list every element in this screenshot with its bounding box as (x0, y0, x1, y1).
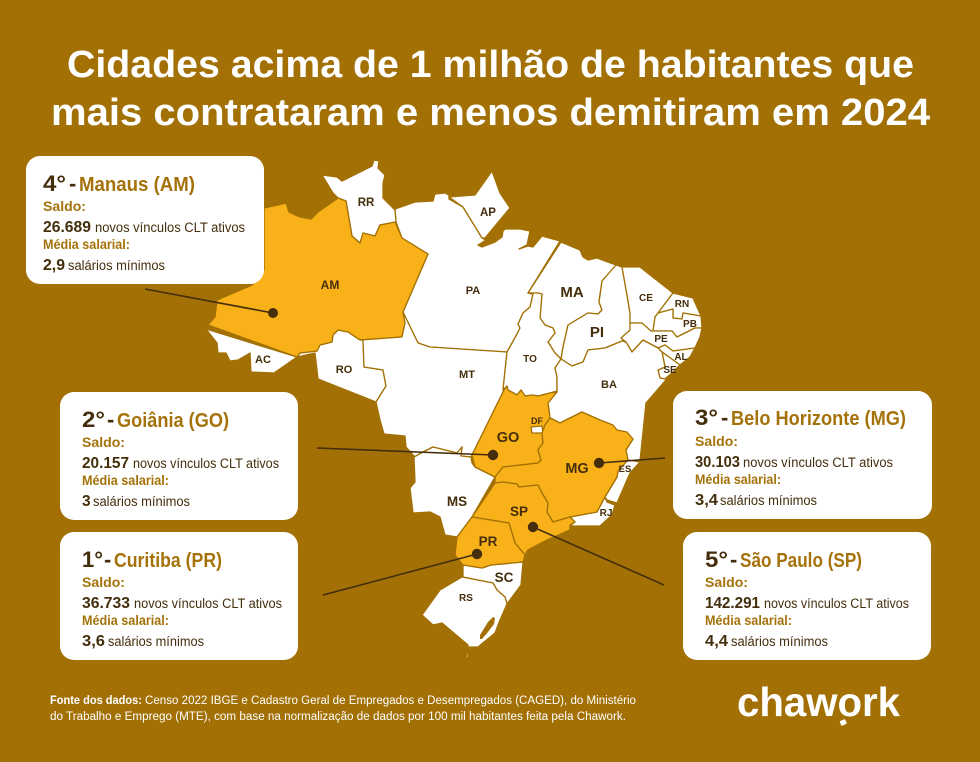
state labels: AC (255, 354, 271, 366)
logo: chawork: chawork (737, 679, 900, 725)
marker: Goiânia (317, 448, 498, 460)
panel: Manaus: Manaus (AM) (79, 174, 195, 196)
panel: Belo Horizonte: Belo Horizonte (MG) (731, 408, 906, 430)
title (51, 44, 930, 134)
state: Tocantins (503, 293, 561, 396)
marker: Curitiba (323, 549, 482, 595)
state labels: PI (590, 324, 604, 341)
panel: Goiânia: novos vínculos CLT ativos (133, 456, 279, 471)
panel: Manaus: 2,9 (43, 257, 65, 274)
panel: São Paulo: 5° (705, 547, 728, 572)
state: Distrito Federal (531, 426, 543, 433)
state: Rondônia (297, 330, 386, 402)
state: Acre (206, 329, 297, 373)
state labels: ES (619, 464, 631, 475)
panel: Goiânia: Saldo: (82, 434, 125, 450)
panel: Curitiba: Curitiba (PR) (114, 550, 222, 572)
state labels: MS (447, 494, 467, 509)
state: Santa Catarina (463, 562, 523, 604)
panel: São Paulo: novos vínculos CLT ativos (764, 596, 909, 611)
state: Mato Grosso do Sul (410, 447, 495, 537)
state: Pará (395, 193, 560, 352)
state labels: RO (336, 364, 353, 376)
panel: Manaus (26, 156, 264, 284)
panel: Manaus: salários mínimos (68, 258, 165, 273)
panel: Manaus: 4° (43, 171, 66, 196)
panel: Belo Horizonte: Média salarial: (695, 471, 781, 487)
panel: Curitiba: 1° (82, 547, 103, 572)
state labels: AP (480, 207, 496, 219)
panel: Belo Horizonte: 30.103 (695, 454, 740, 471)
data source note: do Trabalho e Emprego (MTE), com base na normalização de dados por 100 mil habitantes feita pela Chawork. (50, 711, 626, 723)
state labels: RJ (600, 508, 612, 519)
state: Piauí (561, 265, 632, 366)
panel: Curitiba: salários mínimos (108, 634, 204, 649)
panel: Goiânia (60, 392, 298, 520)
state: Pernambuco (621, 323, 702, 352)
panel: Belo Horizonte: salários mínimos (720, 493, 817, 508)
panel: Curitiba: 3,6 (82, 633, 105, 650)
panel: Curitiba (60, 532, 298, 660)
state labels: AL (674, 352, 688, 363)
lagoon (480, 617, 495, 639)
panel: Belo Horizonte: - (721, 405, 728, 430)
panel: Curitiba: 36.733 (82, 595, 130, 612)
state labels: SP (510, 504, 528, 519)
panel: São Paulo: salários mínimos (731, 634, 828, 649)
marker: Belo Horizonte (594, 458, 665, 468)
panel: Belo Horizonte (673, 391, 932, 519)
panel: Curitiba: novos vínculos CLT ativos (134, 596, 282, 611)
state labels: MA (560, 284, 584, 301)
panel: Manaus: Média salarial: (43, 236, 130, 252)
panel: São Paulo: 4,4 (705, 633, 728, 650)
state: Maranhão (528, 242, 616, 359)
state: Espírito Santo (605, 460, 640, 503)
panel: São Paulo: São Paulo (SP) (740, 550, 862, 572)
panel: Curitiba: Média salarial: (82, 612, 169, 628)
state labels: AM (321, 278, 339, 292)
state labels: BA (601, 379, 617, 391)
state: Rio Grande do Norte (658, 293, 701, 319)
state labels: MT (459, 369, 475, 381)
state: Bahia (548, 340, 672, 461)
state: Minas Gerais (495, 412, 633, 522)
state labels: MG (565, 461, 589, 477)
panel: Belo Horizonte: novos vínculos CLT ativos (743, 455, 893, 470)
state labels: DF (531, 416, 543, 426)
state labels: PR (479, 534, 498, 549)
state labels: CE (639, 293, 653, 304)
leader lines and markers (145, 289, 665, 595)
panel: São Paulo: 142.291 (705, 595, 760, 612)
state labels: RR (358, 197, 375, 209)
panel: Goiânia: Média salarial: (82, 472, 169, 488)
panel: Goiânia: salários mínimos (93, 494, 190, 509)
panel: Goiânia: 20.157 (82, 455, 129, 472)
state labels: SE (663, 365, 677, 376)
state: Ceará (622, 267, 673, 331)
state: Sergipe (658, 352, 680, 379)
panel: São Paulo: Média salarial: (705, 612, 792, 628)
state labels: SC (495, 570, 514, 585)
state labels: RN (675, 299, 689, 310)
marker: Manaus (145, 289, 278, 318)
title: mais contrataram e menos demitiram em 2024 (51, 92, 930, 134)
panel: Manaus: novos vínculos CLT ativos (95, 220, 245, 235)
panel: Goiânia: 3 (82, 493, 91, 510)
state: Paraná (455, 517, 525, 568)
panel: São Paulo: - (730, 547, 737, 572)
panel: Goiânia: - (107, 407, 114, 432)
state: Amapá (449, 171, 510, 238)
state: Paraíba (653, 309, 702, 337)
map of Brazil (206, 160, 702, 659)
data source note (50, 695, 636, 723)
panel: Manaus: Saldo: (43, 198, 86, 214)
marker: São Paulo (528, 522, 664, 585)
panel: Belo Horizonte: 3° (695, 405, 718, 430)
state labels: PE (654, 334, 668, 345)
data source note: Fonte dos dados: (50, 695, 142, 707)
panel: Goiânia: Goiânia (GO) (117, 410, 229, 432)
state labels: TO (523, 354, 537, 365)
state: Rio Grande do Sul (422, 577, 507, 659)
panel: Belo Horizonte: Saldo: (695, 433, 738, 449)
panel: São Paulo: Saldo: (705, 574, 748, 590)
state: Mato Grosso (360, 312, 507, 457)
state: São Paulo (472, 482, 575, 555)
state labels: PB (683, 319, 697, 330)
state: Roraima (322, 160, 396, 243)
title: Cidades acima de 1 milhão de habitantes que (67, 44, 914, 86)
panel: Manaus: 26.689 (43, 219, 91, 236)
panel: Belo Horizonte: 3,4 (695, 492, 718, 509)
state: Rio de Janeiro (570, 497, 615, 526)
state labels (255, 197, 697, 604)
panel: Manaus: - (69, 171, 76, 196)
data source note: Censo 2022 IBGE e Cadastro Geral de Empregados e Desempregados (CAGED), do Ministério (145, 695, 636, 707)
panel: Curitiba: Saldo: (82, 574, 125, 590)
state labels: RS (459, 593, 473, 604)
state: Alagoas (658, 345, 695, 365)
state: Goiás (472, 386, 557, 477)
state labels: PA (466, 285, 480, 297)
state labels: GO (497, 430, 519, 446)
panel: Curitiba: - (104, 547, 111, 572)
state: Amazonas (208, 198, 428, 357)
panel: Goiânia: 2° (82, 407, 105, 432)
panel: São Paulo (683, 532, 931, 660)
